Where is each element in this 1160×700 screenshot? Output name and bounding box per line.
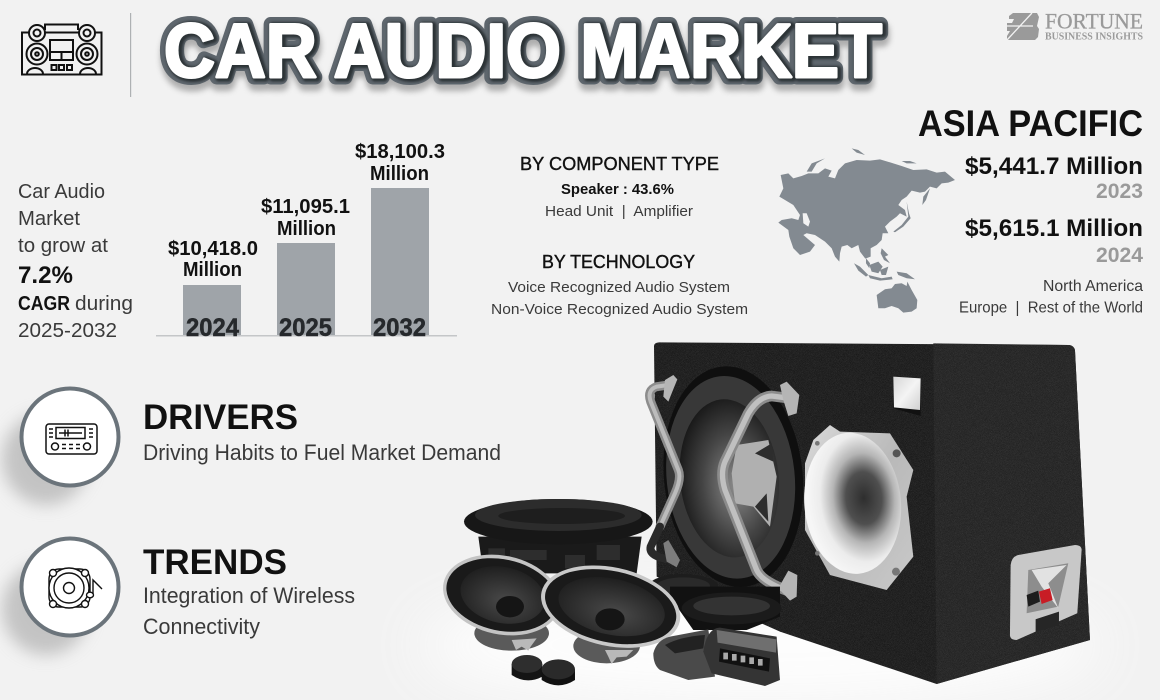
title: CAR AUDIO MARKET (164, 9, 882, 94)
logo: Fortune Business Insights (1006, 8, 1143, 42)
text block: CAGR summary: 7.2% (18, 262, 73, 289)
bar chart: market size: Million (370, 163, 429, 185)
square label (893, 377, 921, 416)
text block: CAGR summary (18, 181, 133, 342)
logo: Fortune Business Insights: FORTUNE (1045, 8, 1143, 34)
text block: by technology: Voice Recognized Audio System (508, 279, 730, 296)
crossover units (653, 628, 780, 686)
enclosure right face (933, 343, 1090, 684)
title: CAR AUDIO MARKET (166, 10, 884, 95)
text block: Asia Pacific figures (918, 103, 1143, 316)
photo glow behind products (420, 585, 1100, 700)
text block: Asia Pacific figures: $5,615.1 Million (965, 215, 1143, 242)
map: Asia Pacific (778, 148, 955, 313)
drivers badge (2, 388, 118, 505)
text block: by technology (491, 251, 748, 318)
text block: by technology: Non-Voice Recognized Audio System (491, 301, 748, 318)
bar chart: market size: 2024 (186, 314, 239, 342)
bass speaker (653, 359, 814, 594)
bar chart: market size: 2025 (279, 314, 332, 342)
text block: CAGR summary: to grow at (18, 235, 108, 257)
text block: Asia Pacific figures: $5,441.7 Million (965, 153, 1143, 180)
icon: boombox (22, 24, 102, 74)
terminal plate (1010, 545, 1082, 640)
right coaxial speaker (533, 553, 688, 664)
bar chart: market size (156, 141, 457, 342)
title: CAR AUDIO MARKET (165, 15, 883, 100)
text block: by component type (520, 153, 719, 220)
handle mounts (663, 375, 799, 601)
panel: trends: Connectivity (143, 614, 260, 639)
bar chart: market size: Million (277, 218, 336, 240)
text block: CAGR summary: Car Audio (18, 181, 105, 203)
panel: drivers (2, 388, 501, 505)
title: CAR AUDIO MARKET (164, 9, 882, 94)
image: speaker set (435, 499, 782, 686)
text block: by component type: Speaker : 43.6% (561, 181, 674, 198)
text block: CAGR summary: CAGR (18, 293, 70, 315)
panel: drivers: Driving Habits to Fuel Market Demand (143, 440, 501, 465)
text block: by component type: Head Unit | Amplifier (545, 203, 693, 220)
image: subwoofer enclosure (650, 342, 1090, 684)
text block: CAGR summary: Market (18, 208, 80, 230)
text block: Asia Pacific figures: 2024 (1096, 244, 1143, 267)
bar chart: market size: $18,100.3 (355, 141, 445, 163)
tweeters (512, 655, 575, 685)
rear mid speakers (648, 574, 782, 630)
text block: by technology: BY TECHNOLOGY (542, 251, 695, 272)
left coaxial speaker (435, 544, 568, 651)
text block: Asia Pacific figures: North America (1043, 278, 1143, 295)
text block: Asia Pacific figures: 2023 (1096, 180, 1143, 203)
logo: Fortune Business Insights: BUSINESS INSIGHTS (1045, 32, 1143, 42)
large subwoofer (464, 499, 653, 573)
bar chart: market size: Million (183, 259, 242, 281)
bar chart: market size: 2032 (373, 314, 426, 342)
horn port (798, 425, 913, 590)
right handle (722, 396, 790, 592)
text block: by component type: BY COMPONENT TYPE (520, 153, 719, 174)
enclosure body (654, 342, 1090, 684)
panel: drivers: DRIVERS (143, 398, 298, 437)
text block: Asia Pacific figures: Europe | Rest of the World (959, 300, 1143, 316)
bar chart: market size: $11,095.1 (261, 196, 350, 218)
bar chart: market size: $10,418.0 (168, 238, 258, 260)
trends badge (2, 538, 118, 655)
panel: trends (2, 538, 355, 655)
text block: Asia Pacific figures: ASIA PACIFIC (918, 103, 1143, 144)
divider (130, 13, 131, 97)
panel: trends: Integration of Wireless (143, 583, 355, 608)
panel: trends: TRENDS (143, 543, 287, 582)
text block: CAGR summary: 2025-2032 (18, 320, 117, 342)
text block: CAGR summary: during (75, 293, 133, 315)
left handle (650, 385, 679, 560)
